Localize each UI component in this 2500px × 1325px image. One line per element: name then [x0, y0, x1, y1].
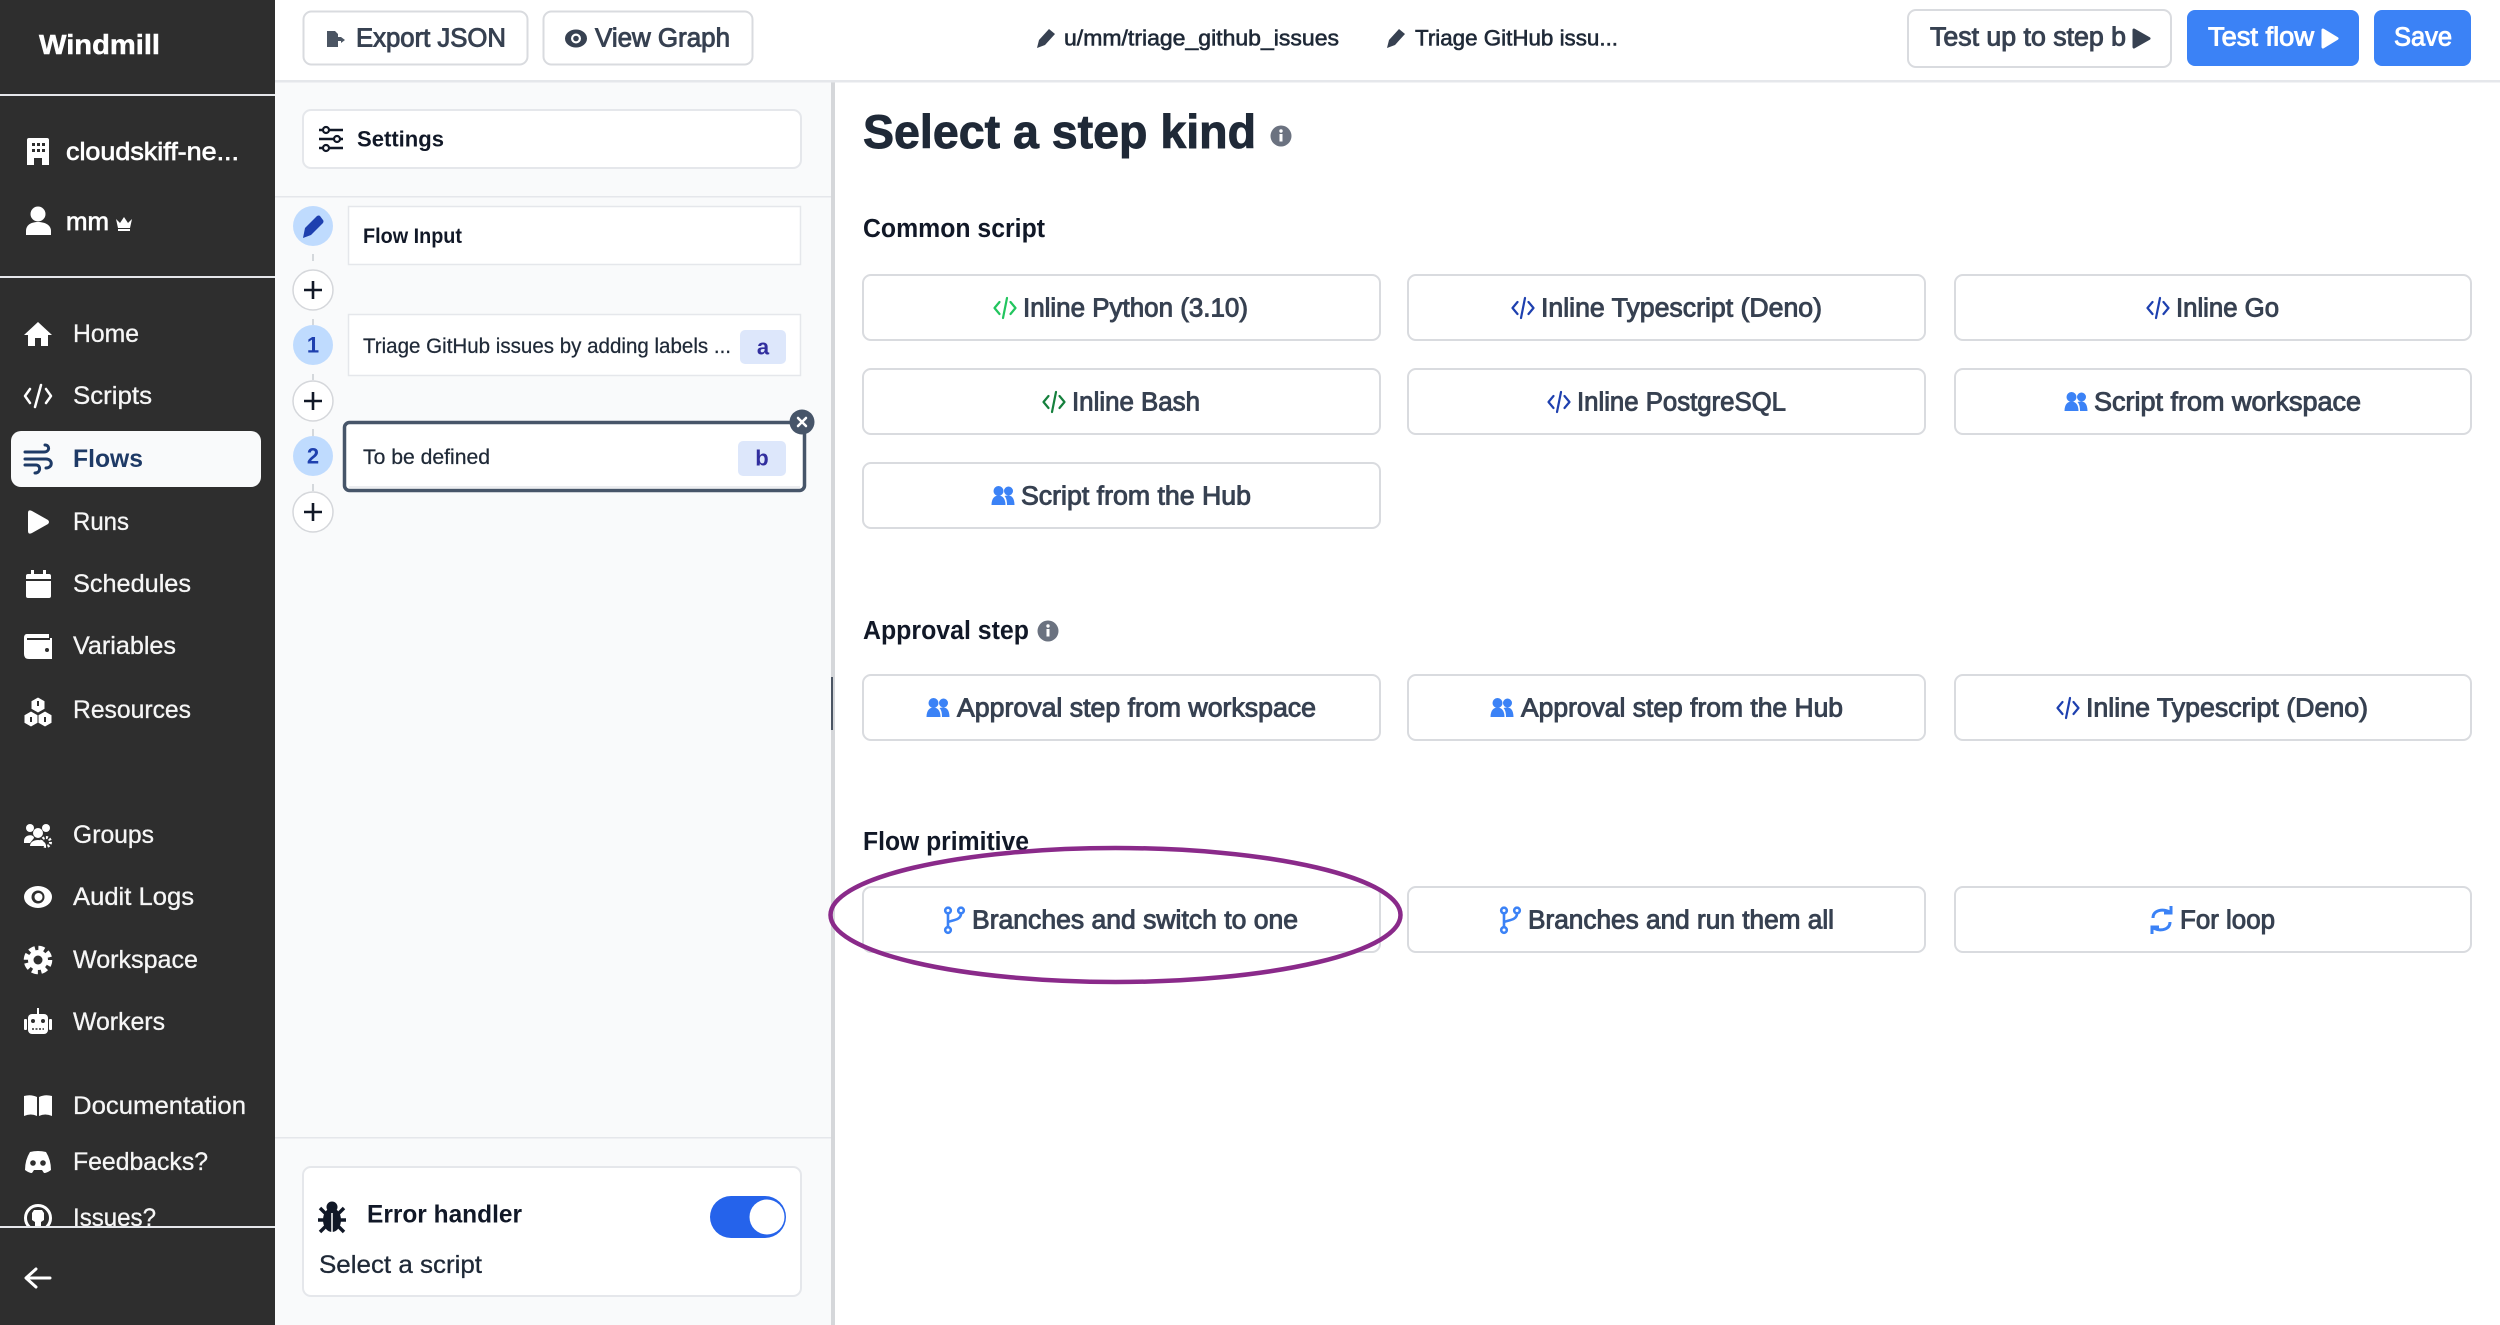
toggle switch: [710, 1196, 786, 1238]
button: for loop: For loop: [2180, 906, 2275, 934]
nav: Resources: Resources: [73, 696, 191, 724]
button: inline python: Inline Python (3.10): [1023, 294, 1248, 322]
nav: Workers: Workers: [73, 1008, 165, 1036]
nav: Groups: [24, 821, 154, 849]
title: Select a step kind: [863, 105, 1256, 158]
nav: Scripts: Scripts: [73, 382, 152, 410]
button: inline go: Inline Go: [2176, 294, 2279, 322]
step 2: to be defined: To be defined: [363, 445, 490, 469]
top bar: [275, 10, 2500, 82]
step 2: to be defined: 2: [307, 444, 319, 468]
button: inline postgresql: Inline PostgreSQL: [1577, 388, 1786, 416]
nav: Feedbacks: Feedbacks?: [73, 1148, 208, 1176]
error handler card: Error handler: [367, 1200, 522, 1228]
nav: Flows active: Flows: [73, 445, 143, 473]
nav: Runs: [28, 508, 129, 536]
step 1: triage: 1: [307, 332, 319, 358]
button: for loop: [1955, 887, 2471, 952]
step 1: triage: a: [757, 334, 770, 360]
test up to step button: Test up to step b: [1930, 24, 2126, 52]
add step button 1: [293, 270, 333, 310]
save button: [2374, 10, 2471, 66]
collapse arrow: [26, 1269, 50, 1287]
button: approval inline typescript: [1955, 675, 2471, 740]
section heading: flow primitive: Flow primitive: [863, 828, 1029, 856]
export json button: Export JSON: [356, 24, 506, 52]
step 2: to be defined: b: [755, 446, 769, 470]
flow summary field: Triage GitHub issu...: [1415, 26, 1618, 50]
button: inline bash: [863, 369, 1380, 434]
button: branches and switch to one: Branches and switch to one: [972, 906, 1298, 934]
nav: Workspace: Workspace: [73, 946, 198, 974]
button: inline python: [863, 275, 1380, 340]
button: script from the hub: Script from the Hub: [1021, 482, 1251, 510]
step 1: triage: Triage GitHub issues by adding labels ...: [363, 334, 731, 358]
user: [26, 206, 132, 236]
icon: bug: [318, 1202, 346, 1232]
section heading: approval step: Approval step: [863, 617, 1029, 645]
export json button: [304, 12, 528, 64]
settings button: Settings: [357, 126, 444, 152]
button: branches and run them all: [1408, 887, 1925, 952]
error handler card: Select a script: [319, 1251, 482, 1279]
test flow button: [2187, 10, 2359, 66]
nav: Documentation: Documentation: [73, 1092, 246, 1120]
button: branches and run them all: Branches and run them all: [1528, 906, 1834, 934]
nav: Home: [24, 320, 139, 348]
workspace selector: cloudskiff-ne...: [66, 138, 239, 166]
button: script from workspace: [1955, 369, 2471, 434]
nav: Home: Home: [73, 320, 139, 348]
button: approval step from workspace: [863, 675, 1380, 740]
panel: flow steps: [275, 81, 831, 1325]
nav: Scripts: [25, 382, 152, 410]
nav: Audit Logs: Audit Logs: [73, 883, 194, 911]
nav: Variables: Variables: [73, 632, 176, 660]
nav: Resources: [24, 696, 191, 727]
add step button 3: [293, 492, 333, 532]
view graph button: View Graph: [595, 24, 730, 52]
button: inline postgresql: [1408, 369, 1925, 434]
callout: purple highlight ellipse: [830, 848, 1400, 982]
button: script from workspace: Script from workspace: [2094, 388, 2361, 416]
view graph button: [544, 12, 752, 64]
button: approval step from workspace: Approval step from workspace: [957, 694, 1316, 722]
step 1: triage: [293, 314, 800, 376]
sidebar: [0, 0, 275, 1325]
nav: Audit Logs: [24, 883, 194, 911]
nav: Workers: [24, 1008, 165, 1036]
test flow button: Test flow: [2208, 24, 2315, 52]
nav: Groups: Groups: [73, 821, 154, 849]
button: inline bash: Inline Bash: [1072, 388, 1200, 416]
step: flow input: Flow Input: [363, 224, 462, 248]
button: approval inline typescript: Inline Typescript (Deno): [2086, 694, 2368, 722]
step: flow input: [293, 206, 800, 264]
add step button 2: [293, 381, 333, 421]
button: approval step from the hub: Approval step from the Hub: [1521, 694, 1843, 722]
nav: Flows active: [11, 431, 261, 487]
error handler card: [303, 1167, 801, 1296]
brand name: Windmill: [39, 29, 160, 60]
panel splitter: [831, 81, 835, 1325]
flow path field: u/mm/triage_github_issues: [1064, 26, 1339, 50]
button: approval step from the hub: [1408, 675, 1925, 740]
nav: Issues: [26, 1204, 156, 1232]
settings button: [303, 110, 801, 168]
step 2: to be defined: [293, 410, 814, 490]
section heading: common script: Common script: [863, 215, 1045, 243]
nav: Issues: Issues?: [73, 1204, 156, 1232]
user: mm: [66, 208, 109, 236]
nav: Schedules: Schedules: [73, 570, 191, 598]
button: inline typescript: [1408, 275, 1925, 340]
nav: Variables: [24, 632, 176, 660]
button: branches and switch to one: [863, 887, 1380, 952]
button: script from the hub: [863, 463, 1380, 528]
button: inline typescript: Inline Typescript (Deno): [1541, 294, 1822, 322]
nav: Runs: Runs: [73, 508, 129, 536]
button: inline go: [1955, 275, 2471, 340]
test up to step button: [1908, 10, 2171, 67]
save button: Save: [2394, 24, 2452, 52]
